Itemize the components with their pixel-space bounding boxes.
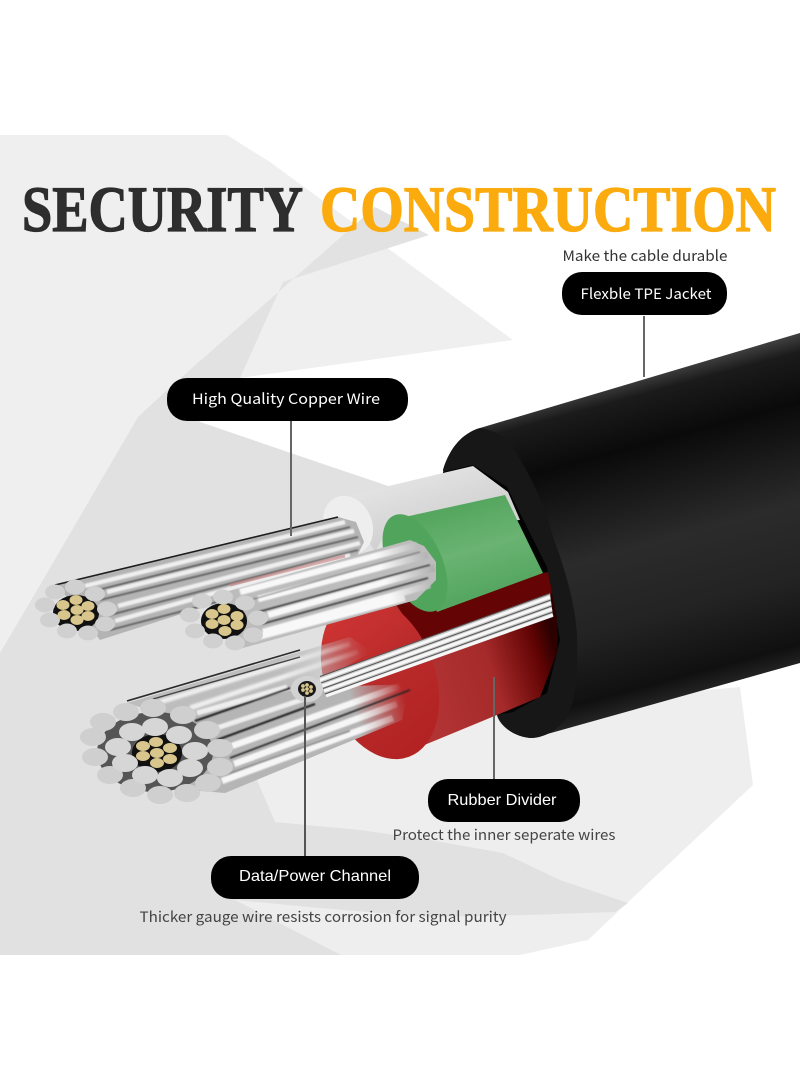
label: Flexble TPE Jacket [562,272,727,315]
copper strands: bundle 3 [127,593,553,793]
leader line: rubber divider [493,677,495,779]
green insulated core [369,495,543,621]
background polygons [0,135,753,955]
lower strands [195,686,410,781]
label: Rubber Divider [428,779,580,822]
black jacket [443,333,800,738]
bundle 3 end face [80,699,233,804]
label: Data/Power Channel: Data/Power Channel [239,868,391,885]
caption: thicker gauge wire: Thicker gauge wire resists corrosion for signal purity [140,906,507,927]
upper strands fading into red [127,637,372,725]
red insulated core [300,572,558,776]
hole edge [430,465,560,715]
lower strand base [190,684,410,793]
thin strand bundle [320,593,553,697]
label: Flexble TPE Jacket: Flexble TPE Jacket [580,283,712,304]
leader line: copper wire [290,421,292,536]
caption: protect the inner wires: Protect the inner seperate wires [392,824,616,845]
leader line: jacket [643,316,645,377]
white insulated core [314,466,520,562]
cable illustration [35,333,800,804]
bundle 1 end face [35,580,117,640]
label: Rubber Divider: Rubber Divider [448,792,557,809]
thin bundle end face [291,676,323,702]
label: High Quality Copper Wire [167,378,408,421]
label: High Quality Copper Wire: High Quality Copper Wire [192,388,380,409]
jacket rim [443,428,577,738]
title: SECURITY [22,174,303,246]
bundle 2 end face [180,590,268,650]
copper strands: bundle 1 [55,517,364,640]
leader line: data channel [304,696,306,856]
title [22,174,776,246]
copper strands: bundle 2 [215,540,436,648]
label: Data/Power Channel [211,856,419,899]
caption: make the cable durable: Make the cable durable [562,245,728,266]
